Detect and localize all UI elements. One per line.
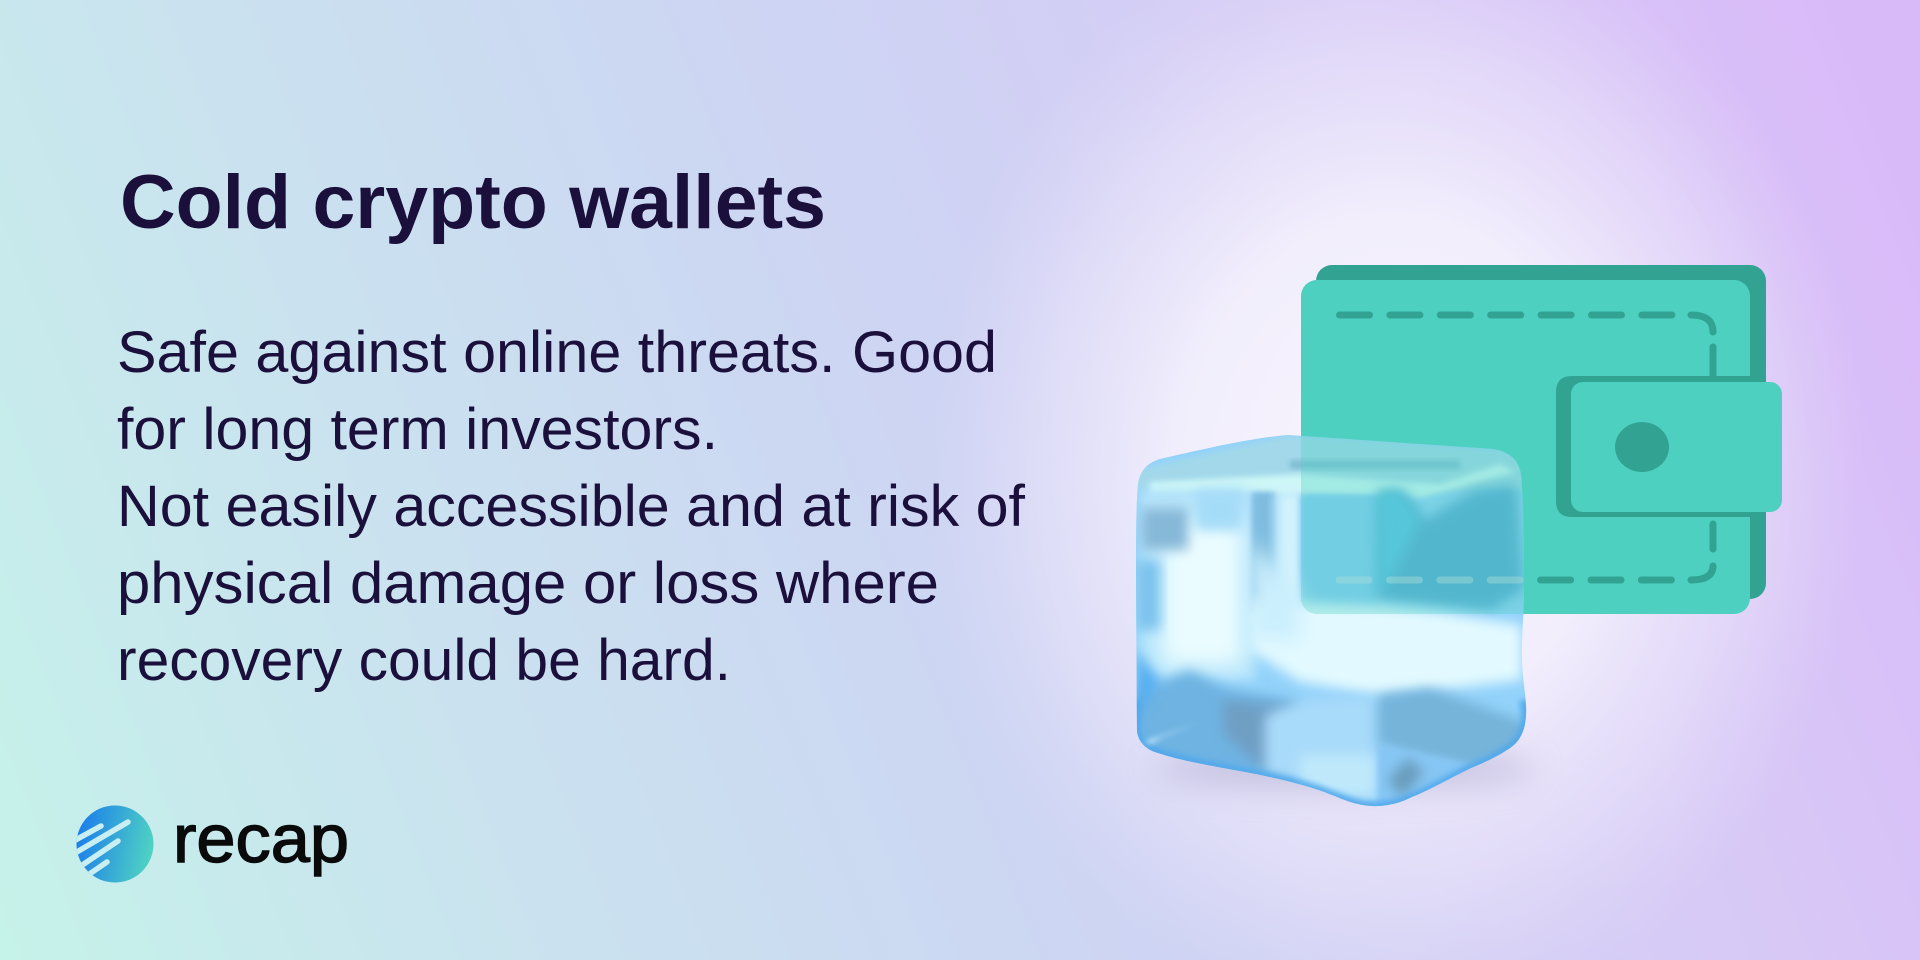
wallet stitching	[1339, 315, 1713, 580]
body text: Safe against online threats. Good	[117, 320, 997, 385]
left face	[1140, 490, 1255, 680]
icon: wallet	[1301, 265, 1782, 614]
body text	[117, 320, 1026, 693]
cube shadow	[1155, 746, 1535, 790]
wallet front	[1301, 280, 1750, 614]
right face	[1378, 485, 1524, 610]
body text: Not easily accessible and at risk of	[117, 474, 1026, 539]
bottom left dark	[1136, 670, 1300, 780]
logo wordmark: recap	[173, 801, 349, 877]
bottom right	[1378, 688, 1526, 768]
lower bright band	[1250, 600, 1522, 695]
icon: ice cube	[1136, 435, 1526, 806]
wallet seen through the ice	[1301, 436, 1524, 614]
logo mark	[70, 806, 154, 882]
top face	[1136, 435, 1524, 490]
body text: physical damage or loss where	[117, 551, 939, 616]
logo: recap	[70, 801, 349, 882]
body text: recovery could be hard.	[117, 628, 731, 693]
wallet strap	[1556, 376, 1750, 517]
title: Cold crypto wallets	[120, 160, 826, 245]
wallet button	[1615, 422, 1669, 472]
wallet back	[1316, 265, 1766, 599]
bottom middle	[1265, 696, 1376, 810]
cube bottom edge	[1137, 700, 1526, 806]
body text: for long term investors.	[117, 397, 718, 462]
